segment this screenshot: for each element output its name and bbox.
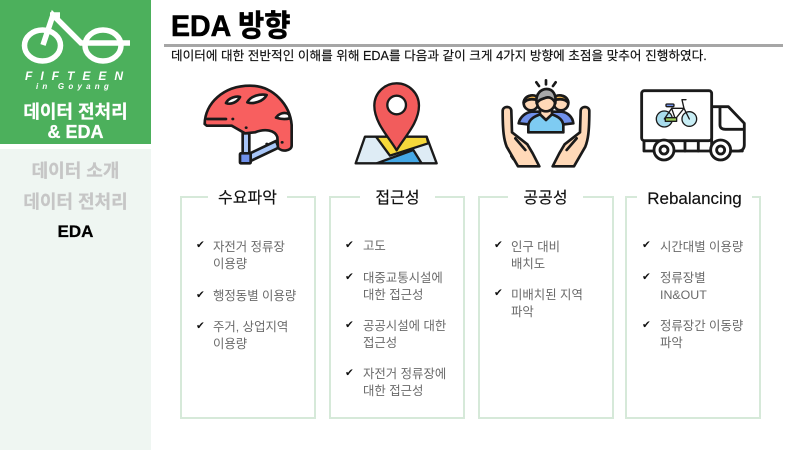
item check: ✔ [642, 239, 651, 251]
item check: ✔ [642, 271, 651, 283]
panel: rebalancing [625, 196, 761, 419]
item text: 정류장별 [660, 271, 706, 285]
item text: 이용량 [213, 256, 247, 270]
panel heading [360, 188, 435, 210]
panel heading: Rebalancing [647, 189, 742, 208]
item text: 자전거 정류장에 [363, 367, 446, 381]
item text: 배치도 [511, 256, 545, 270]
item check: ✔ [642, 319, 651, 331]
panel heading [208, 188, 287, 210]
menu item: EDA: EDA [58, 222, 93, 241]
item text [511, 288, 583, 318]
item text [511, 240, 560, 270]
item check: ✔ [196, 320, 205, 332]
item check: ✔ [345, 319, 354, 331]
item text [363, 319, 446, 350]
panel heading: 수요파악 [218, 190, 277, 207]
item text: 주거, 상업지역 [213, 320, 288, 334]
logo sub-wordmark: in Goyang [36, 82, 113, 91]
logo: bicycle [22, 10, 130, 64]
item text [660, 319, 743, 350]
panel heading [508, 188, 583, 210]
panel heading: 접근성 [375, 190, 420, 207]
item text [660, 271, 707, 302]
section heading [23, 102, 128, 142]
item text: IN&OUT [660, 288, 707, 302]
item text: 행정동별 이용량 [213, 289, 296, 303]
subtitle: 데이터에 대한 전반적인 이해를 위해 EDA를 다음과 같이 크게 4가지 방향에 초점을 맞추어 진행하였다. [171, 49, 707, 63]
item text: 대중교통시설에 [363, 271, 443, 285]
panel heading: 공공성 [523, 190, 568, 207]
item text [363, 271, 443, 302]
item text: 파악 [511, 304, 534, 318]
menu item: data intro: 데이터 소개 [32, 161, 119, 181]
item text: 인구 대비 [511, 240, 560, 254]
item check: ✔ [196, 289, 205, 301]
item text: 대한 접근성 [363, 288, 423, 302]
item text: 시간대별 이용량 [660, 240, 743, 254]
logo wordmark: FIFTEEN [25, 69, 131, 83]
sidebar background [0, 149, 151, 450]
menu item: preprocessing: 데이터 전처리 [23, 192, 128, 212]
item text: 미배치된 지역 [511, 288, 583, 302]
panel: demand [180, 196, 316, 419]
item text: 대한 접근성 [363, 384, 423, 398]
item text: 자전거 정류장 [213, 240, 285, 254]
item text: 파악 [660, 336, 683, 350]
item text [213, 320, 288, 350]
title rule [164, 44, 783, 47]
item check: ✔ [345, 367, 354, 379]
item check: ✔ [345, 239, 354, 251]
item check: ✔ [196, 239, 205, 251]
item check: ✔ [494, 239, 503, 251]
item text: 이용량 [213, 336, 247, 350]
item text: 공공시설에 대한 [363, 319, 446, 333]
item check: ✔ [494, 287, 503, 299]
item text [363, 367, 446, 398]
item text: 접근성 [363, 336, 397, 350]
section heading: & EDA [47, 122, 104, 142]
green header panel [0, 0, 151, 144]
item check: ✔ [345, 271, 354, 283]
item text: 정류장간 이동량 [660, 319, 743, 333]
title: EDA 방향 [171, 10, 290, 43]
item text [213, 240, 285, 270]
panel: accessibility [329, 196, 465, 419]
panel: publicness [478, 196, 614, 419]
item text: 고도 [363, 239, 386, 253]
section heading: 데이터 전처리 [23, 102, 128, 122]
